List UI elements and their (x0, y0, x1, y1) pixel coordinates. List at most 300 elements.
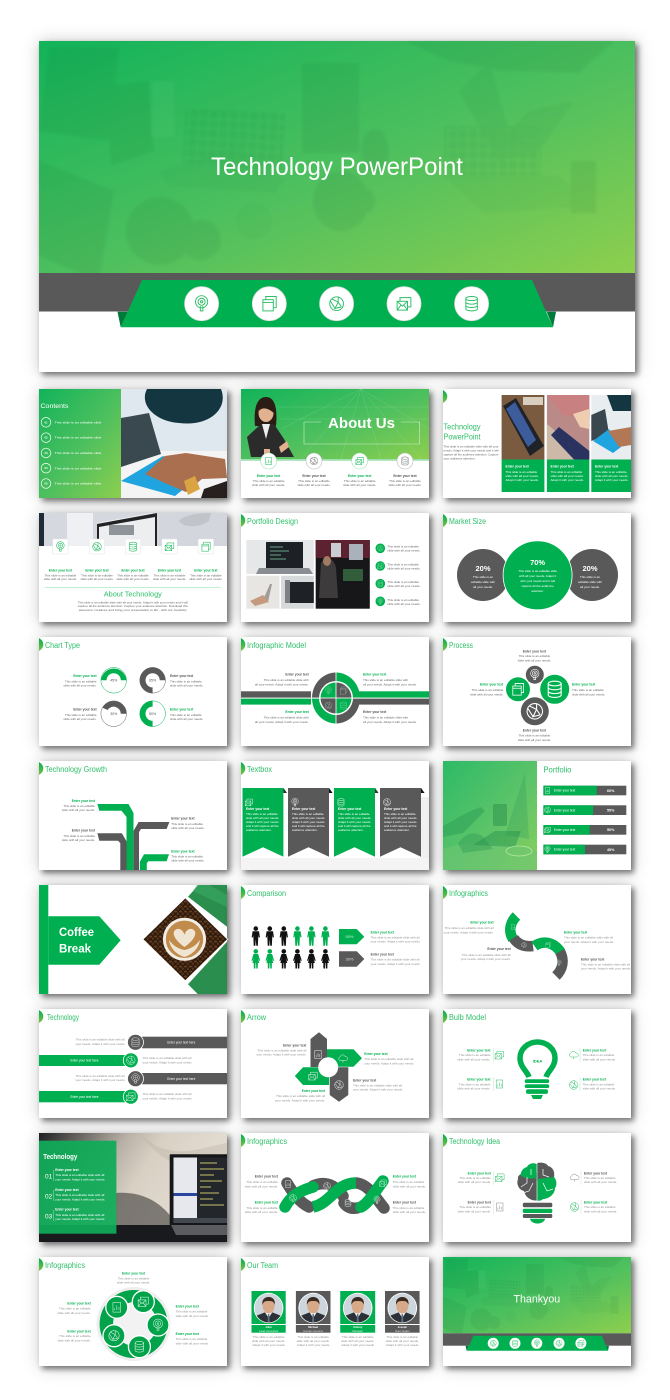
label right: This slide is an editable slide with all (364, 1057, 414, 1061)
ribbon 2: Enter your text (292, 807, 316, 811)
left labels: all your needs. Adapt it with your needs. (255, 682, 309, 686)
title: Infographic Model (247, 641, 306, 650)
donut 65% (140, 667, 165, 693)
progress bar 45% (543, 845, 626, 854)
ribbon 3 (334, 788, 378, 857)
people row 1 (252, 926, 330, 946)
labels left: This slide is an editable slide with all (445, 926, 494, 930)
panel text: Enter your text (595, 464, 619, 468)
ribbon 2: audience attention. (292, 828, 318, 832)
labels left: Enter your text (487, 947, 512, 951)
right labels: This slide is an editable (583, 1082, 615, 1086)
labels left: your needs. Adapt it with your needs. (461, 957, 511, 961)
top label: This slide is an editable (118, 1276, 150, 1280)
title: Process (449, 641, 473, 650)
feature text row: slide with all your needs. (297, 483, 331, 487)
right labels: This slide is an editable (176, 1310, 208, 1314)
right labels: Enter your text (170, 707, 194, 711)
title: Textbox (247, 765, 272, 774)
team member antony: slide with all your needs. (341, 1339, 374, 1343)
team member antony: Antony (353, 1325, 363, 1329)
team member joseph (385, 1291, 420, 1347)
light bulb: IDEA (533, 1058, 542, 1064)
list item 03: 03 (45, 1214, 53, 1220)
list text: slide with all your needs. (387, 584, 421, 588)
bar descriptions: your needs. Adapt it with your needs (75, 1078, 125, 1082)
title: Technology Growth (45, 765, 107, 774)
feature text row: This slide is an editable (253, 479, 285, 483)
title: Market Size (449, 517, 486, 526)
portrait of woman (247, 397, 294, 457)
slide: process (443, 637, 631, 746)
right labels: slide with all your needs. (176, 1314, 209, 1318)
left labels: Enter your text (467, 1078, 491, 1082)
right labels: Enter your text (363, 673, 387, 677)
panel text: Enter your text (506, 464, 530, 468)
label 50%: Enter your text (371, 931, 395, 935)
left labels: This slide is an editable (59, 1307, 91, 1311)
team member john (252, 1291, 286, 1347)
right labels (580, 1048, 616, 1091)
green tinted photo (443, 761, 537, 870)
right label: This slide is an editable (572, 688, 604, 692)
left label: This slide is an editable (472, 688, 504, 692)
cover title: Technology PowerPoint (211, 153, 463, 181)
intro text: needs. Adapt it with your needs and it will (444, 449, 499, 453)
ribbon 3: and it will capture all the (338, 824, 371, 828)
about technology paragraph: capture all the audience attention. Capture your audience attention. Download this (78, 604, 188, 608)
list item 01: your needs. Adapt it with your needs. (55, 1177, 105, 1181)
right labels: This slide is an editable (170, 713, 202, 717)
progress bar 45%: 45% (607, 848, 615, 852)
green bar 2 (39, 1053, 138, 1068)
right label (572, 683, 605, 696)
left labels: Enter your text (468, 1201, 492, 1205)
icon: globe (320, 287, 354, 321)
list item 02: your needs. Adapt it with your needs. (55, 1197, 105, 1201)
right labels: Enter your text (176, 1332, 200, 1336)
team member joseph: Team leader (395, 1329, 410, 1333)
about technology paragraph (78, 600, 188, 612)
team member john: John (265, 1325, 272, 1329)
list item 03: Enter your text (55, 1208, 79, 1212)
intro text: your audience attention. (444, 457, 476, 461)
progress bar 50% (543, 825, 626, 835)
panel text: slide with all your needs. (506, 474, 539, 478)
right labels: all your needs. Adapt it with your needs. (363, 682, 417, 686)
team member michael: Human resource (303, 1329, 324, 1333)
labels right: This slide is an editable slide with all (581, 962, 630, 966)
left labels: slide with all your needs. (245, 1184, 278, 1188)
right labels: slide with all your needs. (584, 1210, 617, 1214)
donut 45% (101, 668, 126, 693)
progress bar 60% (543, 786, 626, 795)
hero ghost desk photo (39, 41, 614, 281)
labels left (444, 921, 512, 961)
branch labels right (171, 817, 205, 862)
green arrow banner: Break (59, 942, 91, 956)
dark bar 1: Enter your text here (167, 1040, 196, 1044)
right labels (581, 1171, 617, 1214)
ribbon 1: Enter your text (246, 807, 270, 811)
label right: your needs. Adapt it with your needs. (364, 1061, 414, 1065)
team member michael (296, 1291, 330, 1347)
panel text: Adapt it with your needs. (550, 478, 584, 482)
green arrow banner (39, 885, 121, 994)
team member joseph: Joseph (398, 1325, 407, 1329)
heading: PowerPoint (444, 432, 481, 442)
labels right: Enter your text (564, 931, 588, 935)
panel text: slide with all your needs. (595, 474, 628, 478)
feature text row: This slide is an editable (298, 479, 330, 483)
label bottom left (275, 1089, 326, 1102)
latte cup (163, 918, 206, 961)
slide: chart type (39, 637, 227, 746)
feature text row: slide with all your needs. (343, 483, 376, 487)
right labels: all your needs. Adapt it with your needs. (363, 720, 417, 724)
ribbon 3: This slide is an editable (338, 812, 370, 816)
panel text: This slide is an editable (506, 470, 537, 474)
right labels: slide with all your needs. (170, 717, 203, 721)
slide: technology powerpoint cover (39, 41, 635, 372)
slide: arrow (241, 1009, 429, 1118)
dna strands (285, 1181, 384, 1208)
panel text: This slide is an editable (550, 470, 582, 474)
ribbon 1 (242, 788, 287, 857)
progress bar 50%: Enter your text (554, 828, 575, 832)
curved chain (510, 916, 563, 976)
left labels: Enter your text (468, 1172, 492, 1176)
ribbon 2: slide with all your needs. (292, 816, 325, 820)
branch labels right: slide with all your needs. (171, 858, 205, 862)
contents list: This slide is an editable slide (54, 420, 102, 424)
left labels: This slide is an editable slide with (264, 716, 309, 720)
left labels: slide with all your needs. (63, 684, 97, 688)
card captions: slide with all your needs. (116, 577, 150, 581)
labels left: Enter your text (470, 921, 494, 925)
right labels: This slide is an editable (393, 1206, 425, 1210)
heading (444, 422, 481, 442)
left labels: Enter your text (285, 710, 310, 714)
top label: Enter your text (523, 649, 547, 653)
bar descriptions: your needs. Adapt it with your needs (142, 1096, 192, 1100)
labels right: This slide is an editable slide with all (564, 936, 613, 940)
icon: database (455, 287, 489, 321)
left labels: This slide is an editable (459, 1176, 491, 1180)
label bottom left: This slide is an editable slide with all (276, 1094, 325, 1098)
card captions: Enter your text (85, 568, 110, 572)
branch labels left: Enter your text (72, 799, 96, 803)
right labels: slide with all your needs. (170, 684, 203, 688)
green bar 2: Enter your text here (70, 1058, 99, 1062)
left labels: This slide is an editable (459, 1053, 491, 1057)
label 30% (371, 953, 420, 966)
arrow 30% (339, 951, 364, 967)
heading: Contents (40, 403, 69, 410)
card captions (44, 568, 223, 581)
panel text (506, 464, 629, 482)
right labels: Enter your text (583, 1078, 607, 1082)
slide: portfolio (443, 761, 631, 870)
bar descriptions: This slide is an editable slide with all (76, 1038, 125, 1042)
labels right (564, 931, 631, 971)
centre circle 70%: with your needs and it will (520, 579, 555, 583)
ribbon 3: Adapt it with your needs (338, 820, 371, 824)
bar descriptions: your needs. Adapt it with your needs (75, 1042, 125, 1046)
label 30%: Enter your text (371, 953, 395, 957)
hub diagram (241, 672, 429, 724)
wheel diagram (97, 1287, 171, 1361)
contents list: 04 (44, 466, 48, 470)
photo: typing on tablet (591, 395, 631, 460)
right labels: Enter your text (584, 1172, 608, 1176)
left label: Enter your text (480, 683, 504, 687)
title: Technology Idea (449, 1137, 500, 1146)
ghost desk photo (443, 1257, 624, 1336)
icon circles (488, 1338, 586, 1349)
labels right: your needs. Adapt it with your needs. (564, 940, 614, 944)
centre circle 70%: This slide is an editable slide (518, 569, 557, 573)
card captions: Enter your text (194, 568, 218, 572)
label bottom left: your needs. Adapt it with your needs. (275, 1098, 325, 1102)
team member joseph: slide with all your needs. (386, 1339, 419, 1343)
left labels: Enter your text (67, 1302, 92, 1306)
slide: technology idea (443, 1133, 631, 1242)
arrow 30%: 30% (345, 956, 354, 962)
bar descriptions (75, 1038, 192, 1100)
team member john: This slide is an editable (253, 1335, 285, 1339)
card captions: This slide is an editable (81, 573, 113, 577)
left labels (57, 1302, 92, 1343)
ribbon 4: This slide is an editable (384, 812, 416, 816)
team member antony: Manager (352, 1329, 363, 1333)
list text: This slide is an editable (387, 545, 419, 549)
team member antony (340, 1291, 375, 1347)
slide: contents (39, 389, 227, 498)
right labels: slide with all your needs. (176, 1341, 209, 1345)
progress bar 50%: 50% (607, 828, 615, 832)
slide: thank you (443, 1257, 631, 1366)
left labels: slide with all your needs. (457, 1086, 491, 1090)
slide: about technology (39, 513, 227, 622)
branch labels left: This slide is an editable (63, 834, 95, 838)
label 50% (371, 931, 420, 944)
feature text row: Enter your text (348, 474, 372, 478)
people row 2 (251, 949, 330, 969)
label bottom right: your needs. Adapt it with your needs. (353, 1088, 403, 1092)
right labels: This slide is an editable (584, 1205, 616, 1209)
top label: This slide is an editable (519, 654, 551, 658)
left labels: This slide is an editable (59, 1334, 91, 1338)
slide: infographic model (241, 637, 429, 746)
contents list: This slide is an editable slide (54, 466, 102, 470)
right labels (170, 674, 203, 721)
icon cards (53, 539, 214, 554)
office photo (39, 513, 227, 546)
label 30%: This slide is an editable slide with all (371, 958, 420, 962)
ribbon 4: slide with all your needs. (384, 816, 417, 820)
right labels: This slide is an editable (583, 1053, 615, 1057)
contents list: This slide is an editable slide (54, 451, 102, 455)
right labels: Enter your text (176, 1305, 200, 1309)
team member john: Lead consultant (259, 1329, 278, 1333)
card icons (57, 542, 210, 551)
right labels: This slide is an editable slide with (363, 716, 408, 720)
labels right: your needs. Adapt it with your needs. (581, 967, 631, 971)
team member joseph: This slide is an editable (386, 1335, 418, 1339)
slide: infographics dna (241, 1133, 429, 1242)
progress bar 55%: Enter your text (554, 808, 575, 812)
progress bar 60%: 60% (607, 789, 615, 793)
feature text row: slide with all your needs. (252, 483, 285, 487)
bar descriptions: This slide is an editable slide with all (76, 1074, 125, 1078)
contents list: This slide is an editable slide (54, 436, 102, 440)
green arrow banner: Coffee (59, 925, 94, 939)
label 50%: This slide is an editable slide with all (371, 936, 420, 940)
coffee bean diamond (143, 898, 228, 981)
top label: slide with all your needs. (518, 658, 551, 662)
side icons (496, 1174, 579, 1211)
icon: windows (252, 287, 286, 321)
thank you text: Thankyou (514, 1293, 560, 1305)
card captions: Enter your text (49, 568, 73, 572)
photo: code on laptop (246, 540, 314, 574)
ribbon 2: Adapt it with your needs (292, 820, 325, 824)
title: Infographics (449, 889, 488, 898)
slide: comparison (241, 885, 429, 994)
ribbon 2: This slide is an editable (292, 812, 324, 816)
right labels: Enter your text (393, 1175, 417, 1179)
left labels: slide with all your needs. (57, 1339, 91, 1343)
right labels: slide with all your needs. (583, 1086, 616, 1090)
list text: This slide is an editable (387, 580, 419, 584)
bar descriptions: This slide is an editable slide with all (142, 1092, 192, 1096)
centre circle 70%: 70% (530, 558, 545, 567)
team member john: Adapt it with your needs (252, 1343, 285, 1347)
slide: infographics snake (443, 885, 631, 994)
left labels: all your needs. Adapt it with your needs. (255, 720, 309, 724)
ribbon (118, 280, 556, 327)
left labels (255, 673, 310, 724)
ribbon 1: Adapt it with your needs (246, 820, 279, 824)
donut 50%: 50% (149, 712, 156, 716)
dark band (39, 273, 635, 312)
slide: technology powerpoint intro (443, 389, 631, 498)
bottom label: Enter your text (523, 728, 547, 732)
wall and laptop photo (39, 1133, 230, 1242)
left labels: This slide is an editable (65, 713, 97, 717)
slide: technology photo (39, 1133, 230, 1242)
left label (470, 683, 504, 696)
title: Bulb Model (449, 1013, 486, 1022)
intro text (444, 445, 499, 461)
card captions: This slide is an editable (154, 573, 186, 577)
right labels (176, 1305, 209, 1345)
card captions: This slide is an editable (117, 573, 149, 577)
left labels (245, 1175, 279, 1214)
ribbon 4: Adapt it with your needs (384, 820, 417, 824)
slide: market size (443, 513, 631, 622)
left labels: Enter your text (285, 673, 310, 677)
title: Infographics (45, 1261, 85, 1270)
photo: laptop on desk (246, 576, 280, 609)
top label: slide with all your needs. (117, 1281, 150, 1285)
title: Technology (47, 1013, 79, 1022)
card captions: Enter your text (121, 568, 146, 572)
team member joseph: Adapt it with your needs (386, 1343, 419, 1347)
ribbon 3: audience attention. (338, 828, 364, 832)
ribbon 1: slide with all your needs. (246, 816, 279, 820)
branch labels right: This slide is an editable (171, 822, 203, 826)
label top: your needs. Adapt it with your needs. (256, 1053, 307, 1057)
dark band (443, 1333, 631, 1346)
title: Portfolio Design (247, 517, 298, 526)
list item 01: Enter your text (55, 1168, 79, 1172)
slide: about us (241, 389, 429, 498)
ribbon 2: and it will capture all the (292, 824, 325, 828)
slide: bulb model (443, 1009, 631, 1118)
centre circle 70%: with all your needs. Adapt it (519, 574, 556, 578)
branch labels left: This slide is an editable (63, 804, 95, 808)
feature text row: Enter your text (302, 474, 327, 478)
slide: technology growth (39, 761, 227, 870)
feature text row: Enter your text (393, 474, 418, 478)
contents list: This slide is an editable slide (54, 482, 102, 486)
right labels: Enter your text (170, 674, 194, 678)
donut 45%: 45% (110, 679, 117, 683)
label right (364, 1052, 414, 1065)
hero gradient background (39, 41, 635, 273)
branch labels left: slide with all your needs. (62, 838, 95, 842)
donut 65%: 65% (149, 679, 156, 683)
branch labels right: slide with all your needs. (171, 826, 205, 830)
slide: infographics wheel (39, 1257, 227, 1366)
progress bar 55%: 55% (607, 808, 615, 812)
brain bulb (517, 1163, 556, 1224)
left labels: Enter your text (467, 1049, 491, 1053)
right circle 20%: editable slide with (578, 580, 602, 584)
pinwheel arrows (295, 1032, 362, 1102)
intro text: This slide is an editable slide with all your (444, 445, 498, 449)
labels right: Enter your text (581, 957, 605, 961)
right circle 20% (566, 549, 618, 601)
feature text row: This slide is an editable (389, 479, 421, 483)
top label: Enter your text (122, 1271, 146, 1275)
left labels: slide with all your needs. (63, 717, 97, 721)
label 50%: your needs. Adapt it with your needs (371, 940, 420, 944)
contents list: 02 (44, 436, 48, 440)
left label: slide with all your needs. (470, 692, 503, 696)
top label (518, 649, 551, 662)
left labels: This slide is an editable (246, 1206, 278, 1210)
heading: Technology (444, 422, 480, 432)
right labels: This slide is an editable slide with (363, 678, 408, 682)
intro text: capture all the audience attention. Capture (444, 453, 499, 457)
left circle 20% (457, 549, 509, 601)
list text: slide with all your needs. (387, 602, 421, 606)
list item 02 (45, 1188, 105, 1201)
ribbon 1: audience attention. (246, 828, 272, 832)
feature text row: Enter your text (257, 474, 281, 478)
progress bar 45%: Enter your text (554, 848, 575, 852)
title: Infographics (247, 1137, 287, 1146)
left labels: Enter your text (73, 707, 97, 711)
ribbon 4 (380, 788, 424, 857)
centre circle 70%: attention. (531, 589, 544, 593)
label right: Enter your text (364, 1052, 388, 1056)
ribbon 1: This slide is an editable (246, 812, 278, 816)
labels left: your needs. Adapt it with your needs. (444, 930, 494, 934)
